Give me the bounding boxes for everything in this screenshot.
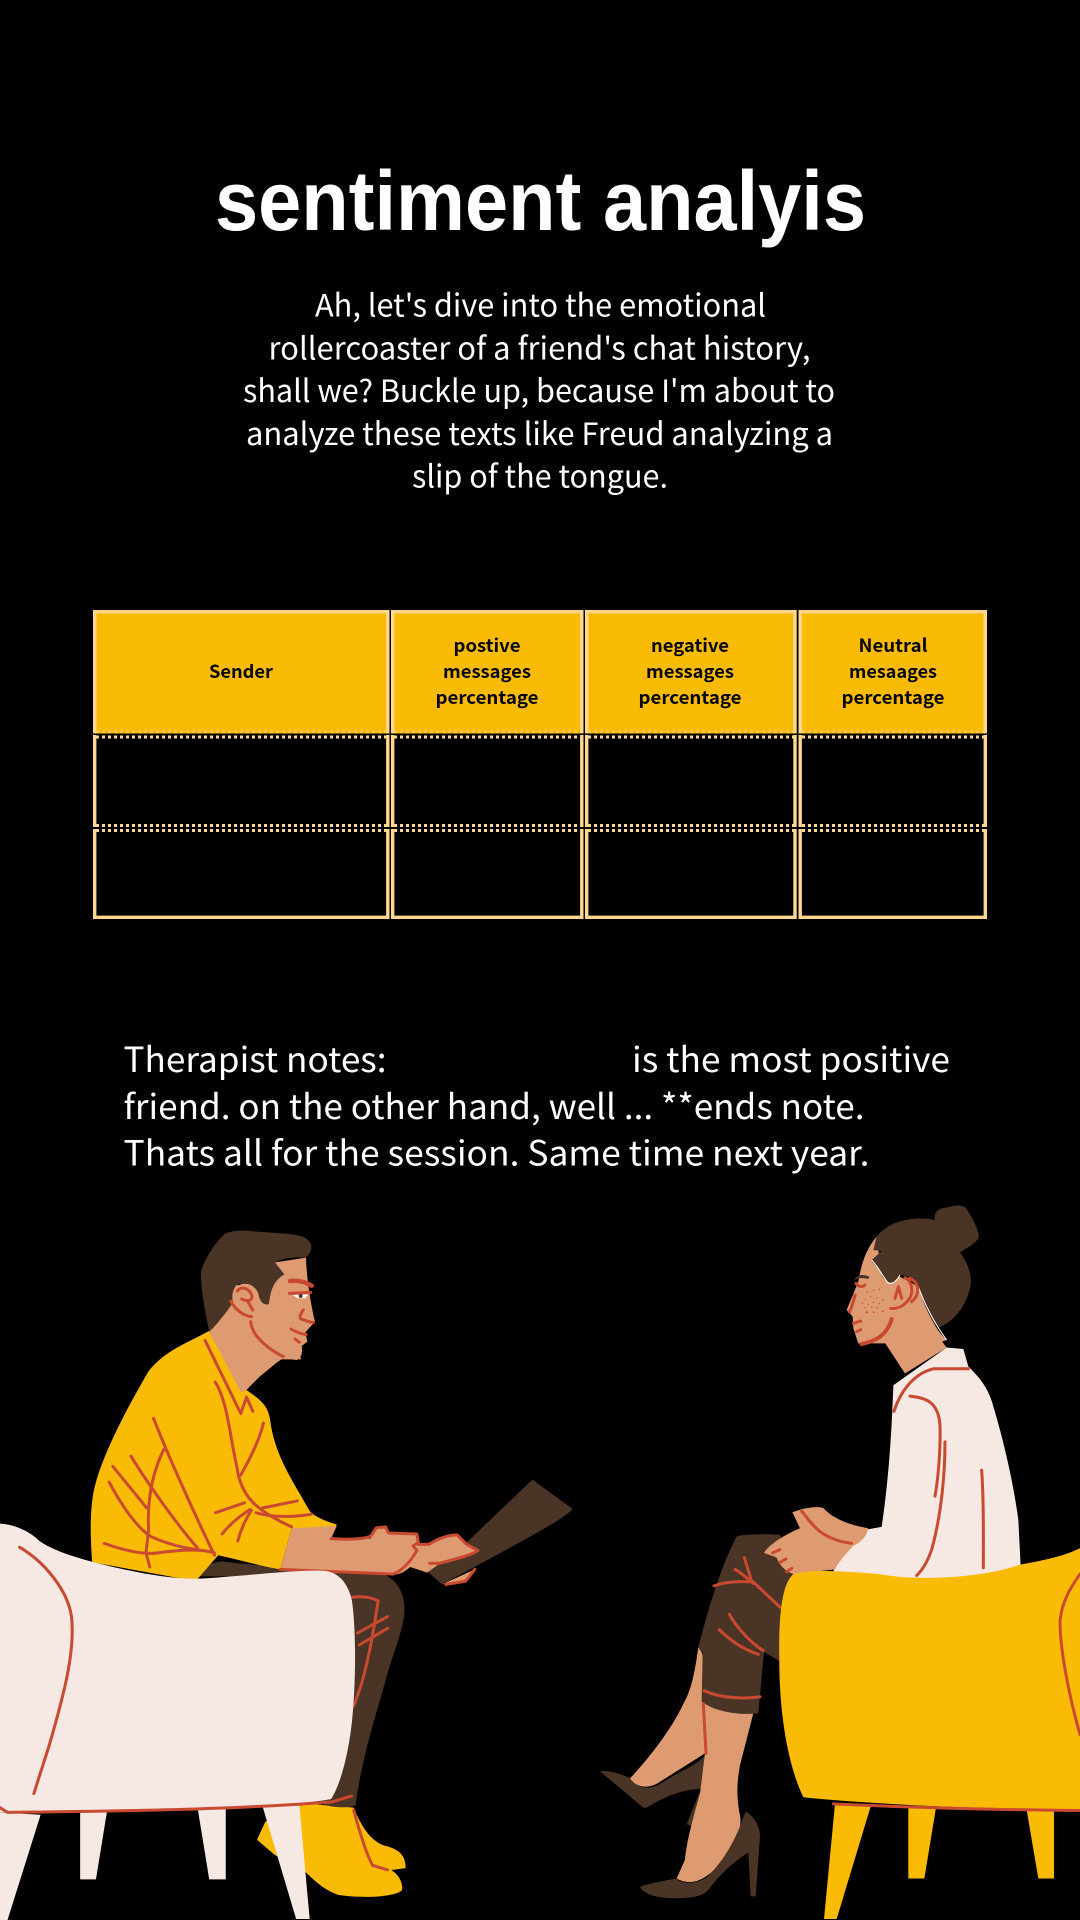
table header cells xyxy=(93,610,987,734)
header: neutral: Neutral xyxy=(858,632,928,658)
intro text block xyxy=(243,280,835,496)
header: negative: messages xyxy=(646,658,734,684)
illustration: man on cream armchair xyxy=(0,1231,573,1920)
header: positive: messages xyxy=(443,658,531,684)
therapist notes: Therapist notes: xyxy=(124,1032,386,1082)
header: neutral: mesaages xyxy=(849,658,937,684)
therapist notes: Thats all for the session. Same time next year. xyxy=(124,1126,870,1176)
intro text block: slip of the tongue. xyxy=(412,452,668,496)
table xyxy=(93,610,987,917)
header: negative xyxy=(638,632,742,710)
illustration: woman on yellow armchair xyxy=(600,1205,1080,1919)
intro text block: analyze these texts like Freud analyzing a xyxy=(246,409,833,454)
header: positive: postive xyxy=(454,632,520,658)
header: sender: Sender xyxy=(209,658,273,684)
title: sentiment analyis xyxy=(215,154,866,248)
therapist notes xyxy=(124,1032,950,1176)
header: neutral: percentage xyxy=(842,684,944,710)
header: positive xyxy=(436,632,538,710)
intro text block: Ah, let's dive into the emotional xyxy=(315,280,766,326)
therapist notes: friend. on the other hand, well ... **ends note. xyxy=(124,1079,864,1129)
header: positive: percentage xyxy=(436,684,538,710)
header: neutral xyxy=(842,632,944,710)
intro text block: rollercoaster of a friend's chat history, xyxy=(268,324,810,368)
header: negative: percentage xyxy=(638,684,742,710)
intro text block: shall we? Buckle up, because I'm about to xyxy=(243,366,835,411)
therapist notes: is the most positive xyxy=(632,1032,950,1082)
header: negative: negative xyxy=(651,632,729,658)
